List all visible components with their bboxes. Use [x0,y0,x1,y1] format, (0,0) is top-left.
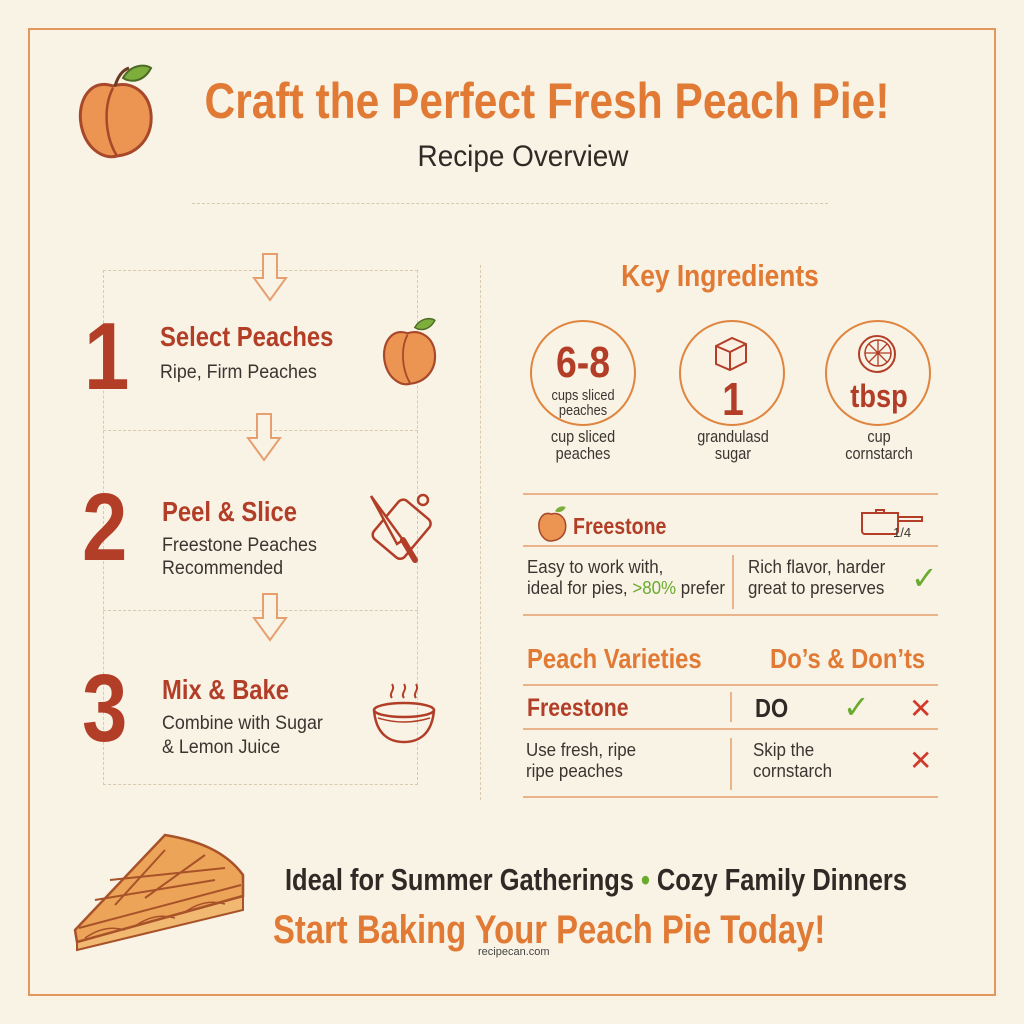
step 1: 1 [84,303,129,410]
table: dos and donts: ✓ [843,689,870,725]
ingredient circles: tbsp [850,378,908,414]
table: freestone: Easy to work with, [527,557,663,577]
step 1: Select Peaches [160,321,333,352]
step 2: Recommended [162,558,283,579]
ingredient: peaches [530,320,636,426]
table: dos and donts: Skip the [753,740,814,760]
ingredient circles: 1 [722,373,744,425]
table: dos and donts [523,684,938,798]
call to action: Start Baking Your Peach Pie Today! [273,908,825,952]
step 2 [82,474,432,581]
ingredient circles: cup [867,427,891,446]
arrow: down 2 [246,413,282,462]
step 3: 3 [82,655,127,762]
title: Craft the Perfect Fresh Peach Pie! [205,73,889,129]
heading: peach varieties / dos & donts: Peach Varieties [527,643,702,674]
table: freestone: Rich flavor, harder [748,557,885,577]
icon: bowl [372,684,436,744]
ingredient: sugar [679,320,785,426]
arrow: down 3 [252,593,288,642]
arrow: down 1 [252,253,288,302]
panel: steps [82,253,436,785]
step 3: Combine with Sugar [162,713,323,734]
icon: peach [78,64,153,158]
table: freestone [523,493,938,616]
table: freestone: ideal for pies, >80% prefer [527,578,725,598]
step 2: Freestone Peaches [162,535,317,556]
icon: pie slice [74,834,244,952]
heading: peach varieties / dos & donts [527,643,925,674]
table: dos and donts: ✕ [909,693,932,724]
step 2: 2 [82,474,127,581]
step 1 [84,303,436,410]
icon: knife and board [370,494,432,563]
tagline: Ideal for Summer Gatherings • Cozy Family Dinners [285,862,907,897]
heading: peach varieties / dos & donts: Do’s & Don’ts [770,643,925,674]
ingredient circles [530,320,931,463]
table: dos and donts: Use fresh, ripe [526,740,636,760]
table: dos and donts: ✕ [909,745,932,776]
table: dos and donts: cornstarch [753,761,832,781]
table: dos and donts: DO [755,693,788,723]
ingredient circles: cup sliced [551,427,615,446]
step 3 [82,655,436,762]
table: freestone: great to preserves [748,578,884,598]
ingredient circles: peaches [556,444,610,463]
table: freestone: ✓ [911,560,938,596]
ingredient circles: sugar [715,444,751,463]
ingredient circles: grandulasd [697,427,769,446]
step 3: & Lemon Juice [162,737,280,758]
heading: key ingredients: Key Ingredients [621,258,819,293]
ingredient: cornstarch [825,320,931,426]
step 3: Mix & Bake [162,674,289,705]
step 1: Ripe, Firm Peaches [160,362,317,383]
subtitle: Recipe Overview [418,140,628,173]
step 2: Peel & Slice [162,496,297,527]
table: freestone: Freestone [573,513,666,539]
table: dos and donts: ripe peaches [526,761,623,781]
ingredient circles: cups sliced [551,387,615,404]
icon: peach small [382,318,436,386]
watermark: recipecan.com [478,946,550,958]
ingredient circles: cornstarch [845,444,913,463]
ingredient circles: 6-8 [556,338,610,387]
table: dos and donts: Freestone [527,694,629,722]
table: freestone: 1/4 [893,525,911,540]
ingredient circles: peaches [559,402,607,419]
